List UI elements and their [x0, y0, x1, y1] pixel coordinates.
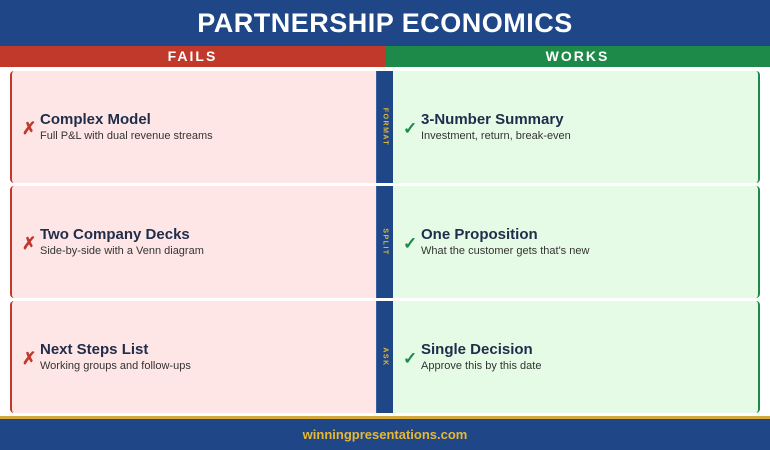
panel: works row 1: Investment, return, break-even [421, 130, 571, 142]
panel: works row 1: 3-Number Summary [421, 111, 564, 128]
panel: fails row 1: ✗ [22, 119, 36, 138]
panel: fails row 1: Complex Model [40, 111, 151, 128]
panel: works row 2: One Proposition [421, 226, 538, 243]
panel: fails row 2: ✗ [22, 234, 36, 253]
panel: fails row 3: Working groups and follow-ups [40, 360, 191, 372]
title: PARTNERSHIP ECONOMICS [197, 8, 573, 38]
panel: works row 3 [393, 301, 760, 413]
panel: works row 1: ✓ [403, 119, 417, 138]
panel: fails row 3: Next Steps List [40, 341, 148, 358]
panel: fails row 2 [10, 186, 377, 298]
title [0, 0, 770, 46]
label strip: split [376, 186, 394, 298]
panel: fails row 1: Full P&L with dual revenue streams [40, 130, 213, 142]
panel: fails row 2: Two Company Decks [40, 226, 190, 243]
panel: works row 1 [393, 71, 760, 183]
header: works [385, 46, 770, 67]
header: works: WORKS [546, 48, 609, 64]
panel: works row 2: What the customer gets that's new [421, 245, 589, 257]
footer: winningpresentations.com [303, 427, 467, 442]
header: fails: FAILS [168, 48, 217, 64]
panel: works row 2 [393, 186, 760, 298]
panel: works row 3: ✓ [403, 349, 417, 368]
panel: works row 3: Single Decision [421, 341, 533, 358]
panel: fails row 3: ✗ [22, 349, 36, 368]
label strip: format: FORMAT [382, 108, 388, 146]
panel: works row 2: ✓ [403, 234, 417, 253]
panel: fails row 3 [10, 301, 377, 413]
label strip: split: SPLIT [382, 228, 388, 256]
footer [0, 416, 770, 450]
label strip: ask [376, 301, 394, 413]
header: fails [0, 46, 385, 67]
panel: works row 3: Approve this by this date [421, 360, 541, 372]
panel: fails row 1 [10, 71, 377, 183]
panel: fails row 2: Side-by-side with a Venn diagram [40, 245, 204, 257]
label strip: ask: ASK [382, 347, 388, 367]
label strip: format [376, 71, 394, 183]
